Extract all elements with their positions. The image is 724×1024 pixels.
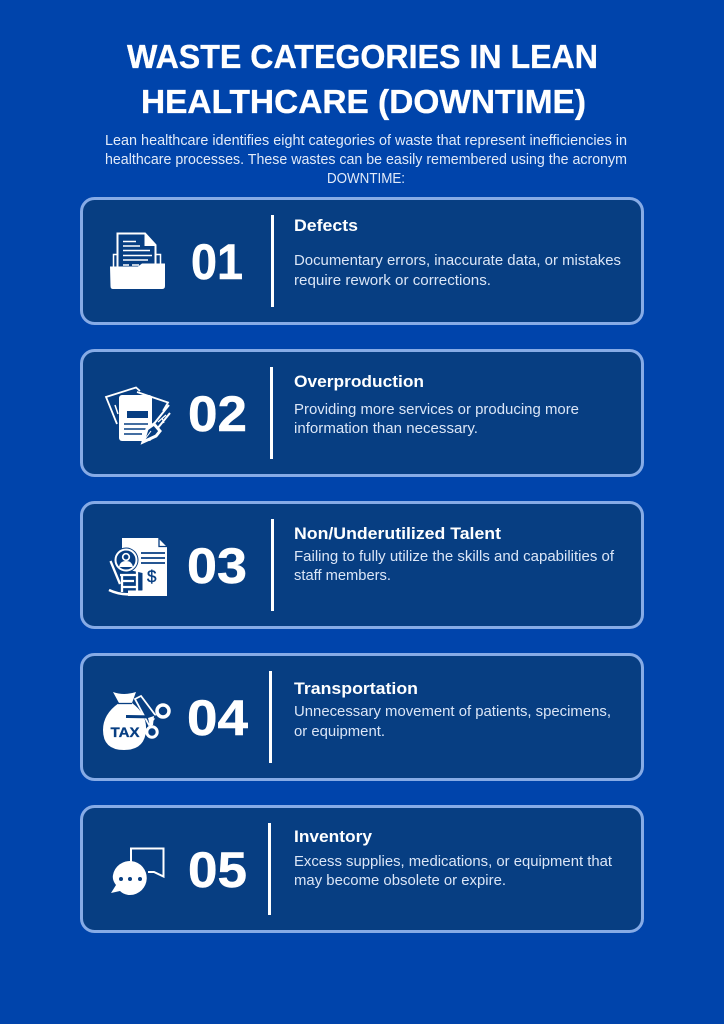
number 05: 05 <box>188 842 247 898</box>
description <box>294 252 621 289</box>
description <box>294 703 611 740</box>
icon: tax bag and scissors: TAX <box>110 724 140 740</box>
icon: rocking chair and document: $ <box>147 567 157 586</box>
number 02: 02 <box>188 386 247 442</box>
heading: Inventory <box>294 827 373 846</box>
description: Documentary errors, inaccurate data, or mistakes <box>294 252 621 269</box>
intro text: healthcare processes. These wastes can be easily remembered using the acronym <box>105 152 627 168</box>
description <box>294 548 615 584</box>
intro text: DOWNTIME: <box>327 171 405 187</box>
heading: Transportation <box>294 679 418 698</box>
icon: papers and pen <box>106 388 170 442</box>
description: Failing to fully utilize the skills and capabilities of <box>294 548 615 565</box>
description <box>294 401 579 437</box>
description: information than necessary. <box>294 420 478 437</box>
intro text <box>105 133 627 187</box>
heading: Overproduction <box>294 372 424 391</box>
heading: Non/Underutilized Talent <box>294 524 501 543</box>
description: staff members. <box>294 567 391 584</box>
panel: defects <box>82 198 642 324</box>
title <box>127 38 598 120</box>
title: WASTE CATEGORIES IN LEAN <box>127 38 598 75</box>
description: Providing more services or producing more <box>294 401 579 418</box>
description: require rework or corrections. <box>294 272 491 289</box>
heading: Defects <box>294 216 358 235</box>
number 01: 01 <box>191 234 243 290</box>
icon: chat bubbles <box>111 848 164 895</box>
description: or equipment. <box>294 723 385 740</box>
panel: transportation <box>82 654 642 780</box>
description: Excess supplies, medications, or equipment that <box>294 853 613 870</box>
panel: inventory <box>82 806 642 932</box>
description <box>294 853 613 889</box>
icon: tax bag and scissors <box>103 692 169 750</box>
icon: document folder <box>110 233 165 289</box>
intro text: Lean healthcare identifies eight categories of waste that represent inefficiencies in <box>105 133 627 149</box>
panel: talent <box>82 502 642 628</box>
description: Unnecessary movement of patients, specimens, <box>294 703 611 720</box>
icon: rocking chair and document <box>109 538 167 596</box>
title: HEALTHCARE (DOWNTIME) <box>141 83 586 120</box>
description: may become obsolete or expire. <box>294 872 506 889</box>
panel: overproduction <box>82 350 642 476</box>
number 03: 03 <box>187 538 247 594</box>
number 04: 04 <box>187 690 248 746</box>
